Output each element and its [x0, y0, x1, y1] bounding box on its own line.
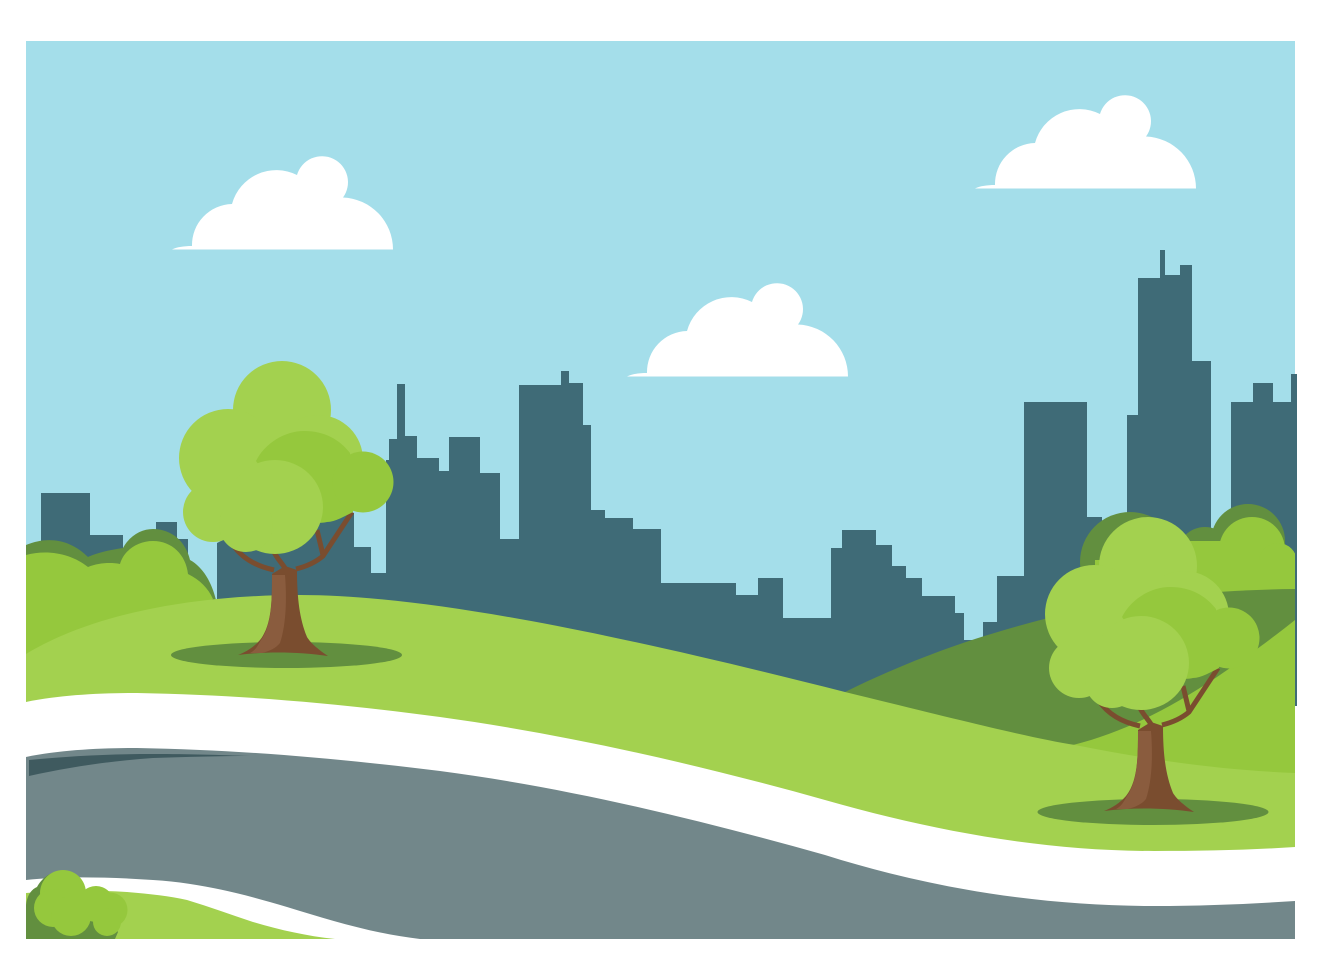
bushes behind right hill: [1080, 504, 1295, 592]
bush bottom left: [26, 870, 128, 939]
clouds: [172, 95, 1196, 377]
lower green verge: [26, 891, 335, 939]
tree shadow left: [171, 642, 402, 668]
tree left: [179, 361, 394, 656]
road highlight: [29, 754, 250, 776]
main green hill: [26, 595, 1295, 939]
cloud right: [975, 95, 1196, 188]
mid green hill right: [1073, 620, 1295, 780]
bushes top left: [26, 529, 216, 680]
dark green hill right: [845, 589, 1295, 773]
tree shadow right: [1038, 799, 1268, 825]
road: [26, 748, 1295, 939]
cloud left: [172, 156, 393, 250]
city skyline: [41, 250, 1297, 760]
cloud centre: [627, 283, 848, 376]
tree right: [1045, 517, 1260, 812]
white sidewalk: [26, 693, 1295, 939]
